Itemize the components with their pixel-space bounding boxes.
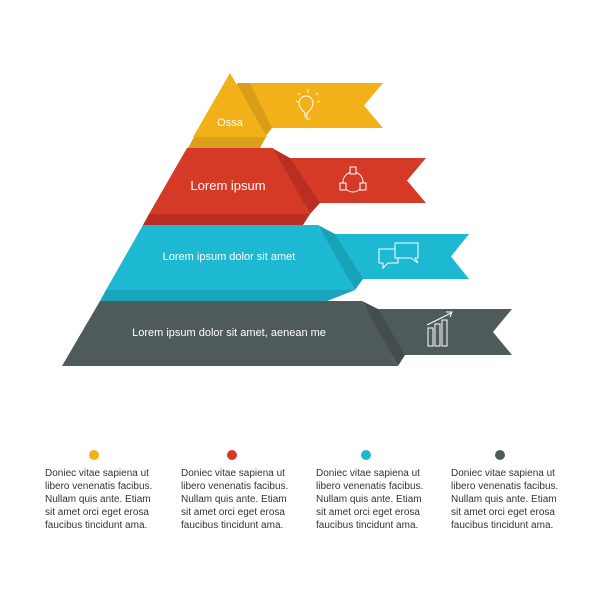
icon: chat [379,243,418,268]
dot: red [227,450,237,460]
text column 1 [45,468,152,531]
icon: bulb [296,89,320,119]
text column 2 [181,468,288,531]
ribbon: yellow [237,83,383,137]
text column 1: Doniec vitae sapiena ut [45,468,149,479]
dot: cyan [361,450,371,460]
tier: red: Lorem ipsum [190,178,266,193]
text column 3: libero venenatis facibus. [316,481,423,492]
text column 3: sit amet orci eget erosa [316,507,420,518]
tier: yellow [188,73,267,148]
tier: red [143,148,310,225]
text column 3: Doniec vitae sapiena ut [316,468,420,479]
text column 1: Nullam quis ante. Etiam [45,494,151,505]
text column 1: sit amet orci eget erosa [45,507,149,518]
text column 4: Nullam quis ante. Etiam [451,494,557,505]
text column 4: faucibus tincidunt ama. [451,520,553,531]
text column 4: Doniec vitae sapiena ut [451,468,555,479]
text column 2: libero venenatis facibus. [181,481,288,492]
pyramid diagram [62,73,512,366]
tier: cyan [100,225,355,301]
dot: gray [495,450,505,460]
dot: yellow [89,450,99,460]
text column 2: sit amet orci eget erosa [181,507,285,518]
text column 4: libero venenatis facibus. [451,481,558,492]
text column 3 [316,468,423,531]
tier: cyan: Lorem ipsum dolor sit amet [163,251,295,263]
tier: gray [62,301,398,366]
text column 4: sit amet orci eget erosa [451,507,555,518]
tier: gray: Lorem ipsum dolor sit amet, aenean me [132,327,326,339]
text column 2: faucibus tincidunt ama. [181,520,283,531]
text column 3: faucibus tincidunt ama. [316,520,418,531]
icon: chart [427,312,452,346]
ribbon: cyan [318,225,469,290]
ribbon: gray [362,301,512,366]
text column 3: Nullam quis ante. Etiam [316,494,422,505]
text column 2: Doniec vitae sapiena ut [181,468,285,479]
text column 1: libero venenatis facibus. [45,481,152,492]
text column 4 [451,468,558,531]
text column 2: Nullam quis ante. Etiam [181,494,287,505]
text column 1: faucibus tincidunt ama. [45,520,147,531]
tier: yellow: Ossa [217,117,244,129]
ribbon: red [272,148,426,214]
icon: people [340,167,366,192]
